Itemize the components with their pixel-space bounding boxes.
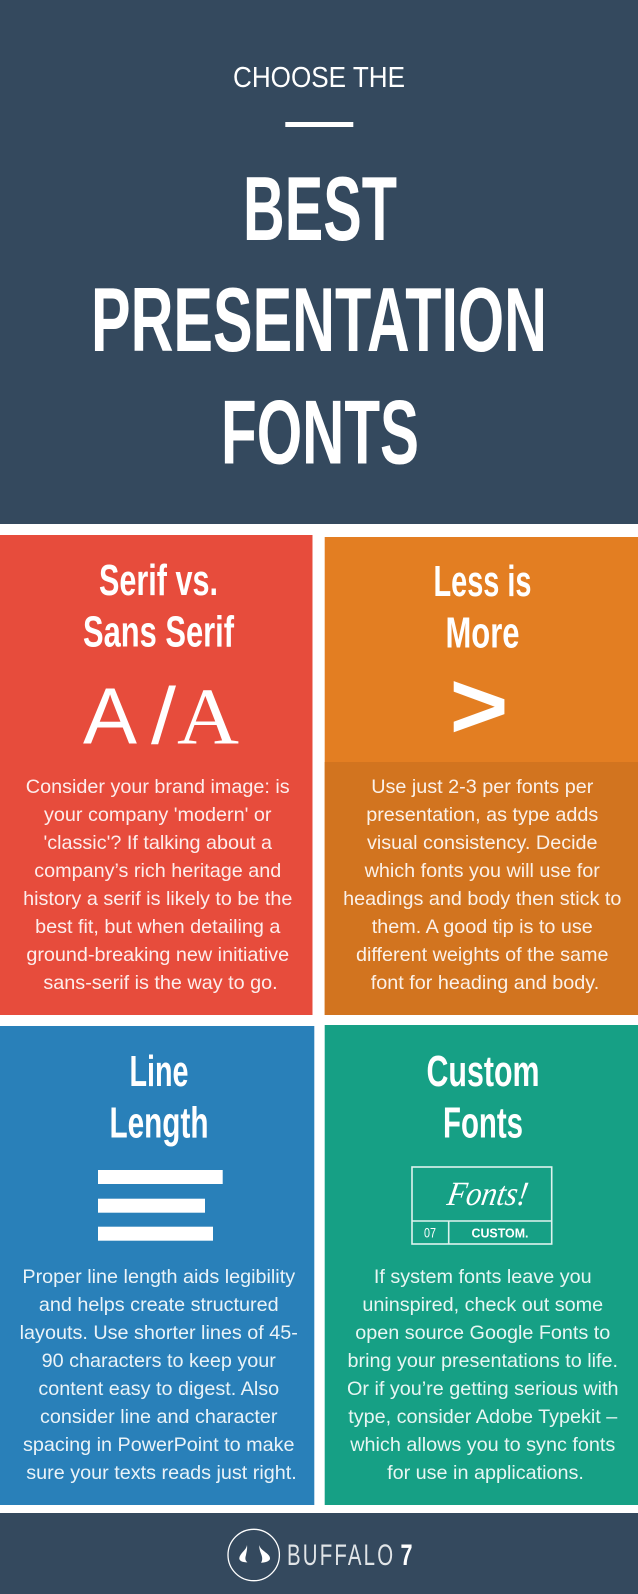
icon: A/A type comparison: A xyxy=(177,674,239,762)
body text: custom fonts: Or if you’re getting serious with xyxy=(347,1378,619,1400)
body text: less is more: different weights of the same xyxy=(356,944,609,966)
body text: line length: content easy to digest. Also xyxy=(38,1378,279,1400)
body text: line length: Proper line length aids legibility xyxy=(22,1266,295,1288)
body text: line length: layouts. Use shorter lines of 45- xyxy=(20,1322,298,1344)
icon: custom font label xyxy=(412,1167,552,1244)
body text: line length: 90 characters to keep your xyxy=(42,1350,276,1372)
heading: custom fonts: Fonts xyxy=(443,1099,523,1148)
panel: header xyxy=(0,0,638,524)
heading: less is more xyxy=(434,557,532,658)
body text: custom fonts: type, consider Adobe Typekit – xyxy=(348,1406,617,1428)
body text: serif vs sans serif: your company 'modern' or xyxy=(44,804,272,826)
body background band xyxy=(325,762,638,1015)
panel: serif vs sans serif xyxy=(0,535,312,1015)
body text: less is more: them. A good tip is to use xyxy=(372,916,593,938)
body text: less is more: headings and body then stick to xyxy=(343,888,621,910)
title: BEST xyxy=(243,159,397,260)
panel: custom fonts xyxy=(325,1025,638,1505)
body text: serif vs sans serif: best fit, but when detailing a xyxy=(35,916,280,938)
divider under subtitle xyxy=(285,122,353,127)
body text: serif vs sans serif: company’s rich heritage and xyxy=(34,860,281,882)
heading: serif vs sans serif: Serif vs. xyxy=(99,556,218,605)
body text: custom fonts: open source Google Fonts to xyxy=(355,1322,610,1344)
subtitle: choose the: CHOOSE THE xyxy=(233,62,405,94)
panel: less is more xyxy=(325,537,638,1015)
icon: custom font label: 07 xyxy=(424,1225,436,1241)
body text: serif vs sans serif: 'classic'? If talking about a xyxy=(43,832,272,854)
icon: greater-than symbol: > xyxy=(450,653,508,759)
heading: custom fonts: Custom xyxy=(426,1047,540,1096)
body text: line length: spacing in PowerPoint to make xyxy=(23,1434,295,1456)
icon: A/A type comparison: / xyxy=(151,672,177,760)
body text: less is more: font for heading and body. xyxy=(371,972,599,994)
heading: less is more: Less is xyxy=(434,557,532,606)
body text: custom fonts: which allows you to sync fonts xyxy=(349,1434,615,1456)
title xyxy=(91,159,547,484)
body text: custom fonts: bring your presentations to life. xyxy=(348,1350,618,1372)
logo: buffalo head xyxy=(228,1529,279,1581)
wordmark: buffalo7: BUFFALO xyxy=(287,1539,393,1572)
body text: serif vs sans serif: sans-serif is the way to go. xyxy=(43,972,278,994)
body text: less is more: which fonts you will use for xyxy=(364,860,600,882)
icon: custom font label: Fonts! xyxy=(444,1175,531,1213)
title: FONTS xyxy=(221,382,419,484)
heading: line length: Line xyxy=(130,1047,188,1096)
body text: custom fonts: for use in applications. xyxy=(387,1462,584,1484)
body text: custom fonts: If system fonts leave you xyxy=(374,1266,592,1288)
heading: line length: Length xyxy=(110,1099,208,1148)
panel: footer xyxy=(0,1513,638,1594)
panel: line length xyxy=(0,1026,314,1505)
heading: serif vs sans serif xyxy=(83,556,234,657)
heading: less is more: More xyxy=(446,609,520,658)
body text: line length: and helps create structured xyxy=(39,1294,279,1316)
body text: less is more: presentation, as type adds xyxy=(366,804,598,826)
body text: serif vs sans serif: ground-breaking new initiative xyxy=(26,944,289,966)
body text: less is more: Use just 2-3 per fonts per xyxy=(371,776,594,798)
icon: A/A type comparison xyxy=(83,672,239,762)
heading: custom fonts xyxy=(426,1047,540,1148)
wordmark: buffalo7: 7 xyxy=(400,1539,412,1572)
body text: line length: consider line and character xyxy=(40,1406,278,1428)
body text: less is more: visual consistency. Decide xyxy=(367,832,598,854)
icon: A/A type comparison: A xyxy=(83,672,138,760)
icon: custom font label: CUSTOM. xyxy=(472,1226,528,1241)
body text: serif vs sans serif: history a serif is likely to be the xyxy=(23,888,292,910)
heading: serif vs sans serif: Sans Serif xyxy=(83,608,234,657)
heading: line length xyxy=(110,1047,208,1148)
body text: custom fonts: uninspired, check out some xyxy=(362,1294,603,1316)
body text: line length: sure your texts reads just right. xyxy=(26,1462,297,1484)
icon: text lines xyxy=(98,1170,223,1241)
body text: serif vs sans serif: Consider your brand image: is xyxy=(26,776,290,798)
